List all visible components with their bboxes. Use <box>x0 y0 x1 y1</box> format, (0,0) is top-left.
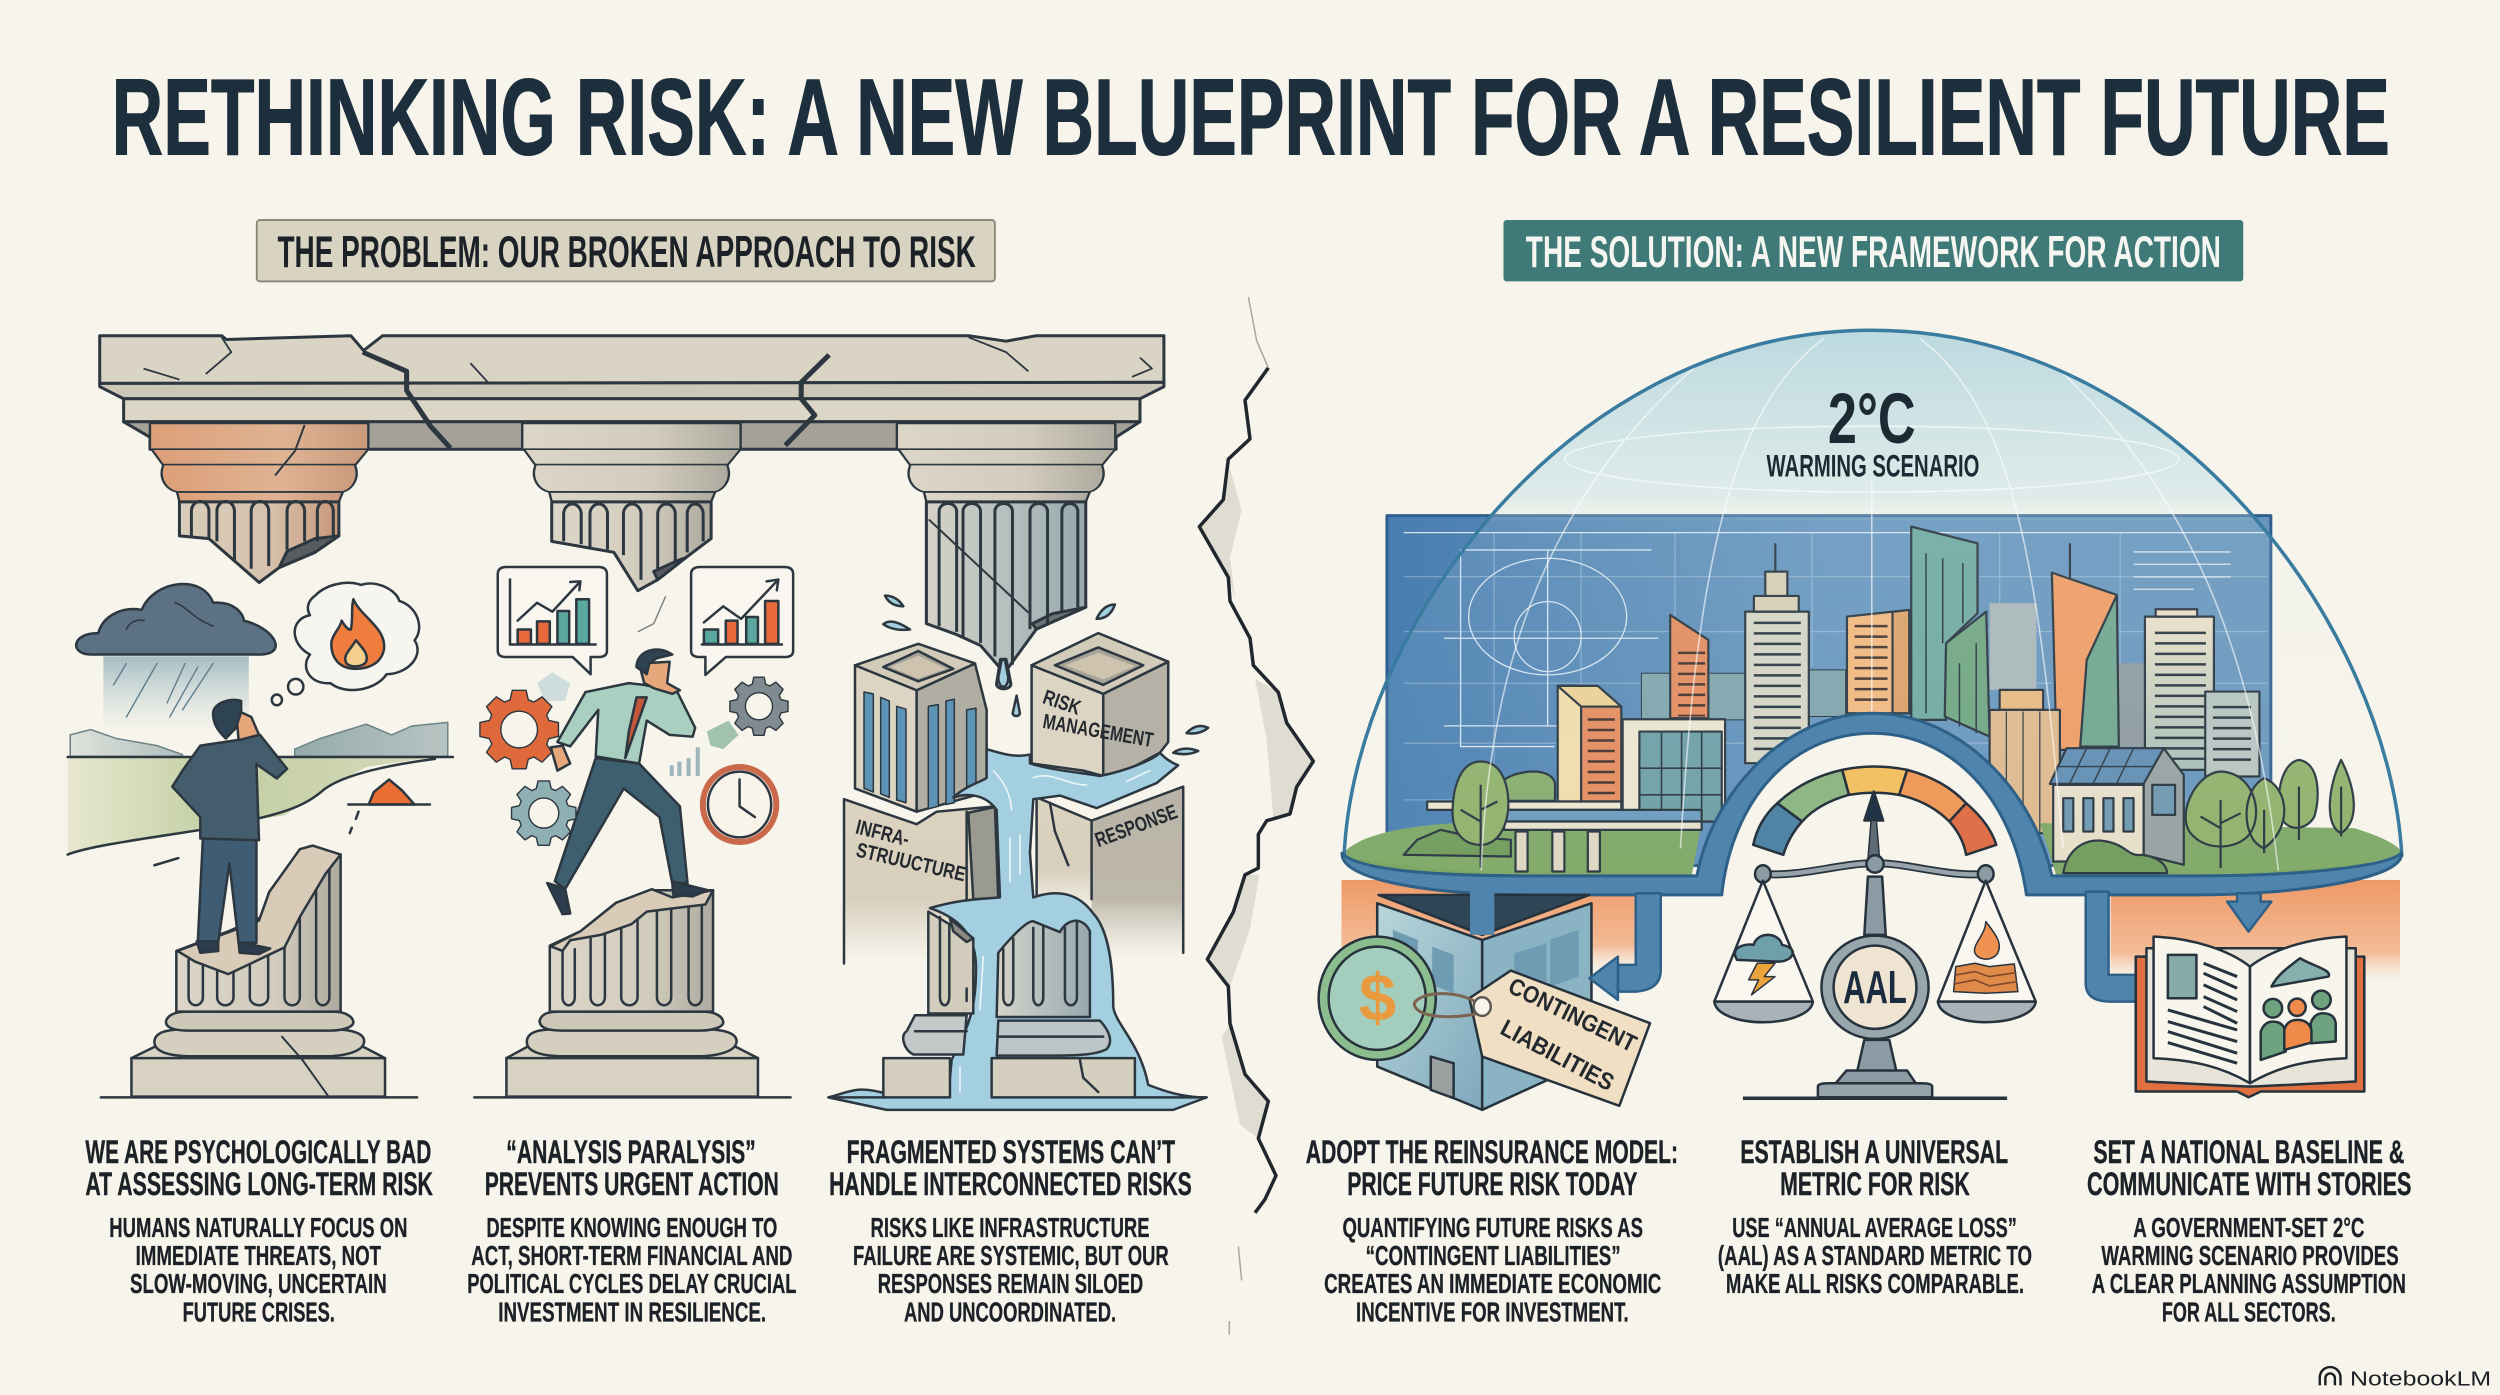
glass dome <box>1344 330 2402 883</box>
text column 6 <box>2087 1133 2411 1328</box>
text column 4: ADOPT THE REINSURANCE MODEL: <box>1306 1133 1678 1170</box>
text column 5: ESTABLISH A UNIVERSAL <box>1740 1133 2008 1170</box>
blueprint drafting lines <box>1404 533 2267 833</box>
right trees <box>2279 760 2354 833</box>
lower silo boxes <box>844 799 997 963</box>
silo labels: RISK <box>1040 686 1084 720</box>
man 1 <box>198 838 256 943</box>
text column 1: SLOW-MOVING, UNCERTAIN <box>130 1268 387 1299</box>
building with coin and contingent liabilities tag <box>1319 890 1661 1110</box>
gauge needle <box>1864 792 1883 821</box>
text column 3 <box>829 1133 1192 1328</box>
stump 1 <box>131 1046 385 1097</box>
balance scale with AAL dial <box>1714 855 2036 1098</box>
silo labels: INFRA- <box>853 816 912 851</box>
text column 1: IMMEDIATE THREATS, NOT <box>136 1240 381 1271</box>
text column 1: HUMANS NATURALLY FOCUS ON <box>109 1212 407 1243</box>
open book with pipe and arrow <box>2086 892 2364 1097</box>
text column 5: METRIC FOR RISK <box>1780 1165 1970 1202</box>
text column 2: ACT, SHORT-TERM FINANCIAL AND <box>471 1240 792 1271</box>
text column 1: WE ARE PSYCHOLOGICALLY BAD <box>85 1133 431 1170</box>
text column 2 <box>467 1133 796 1328</box>
text column 2: DESPITE KNOWING ENOUGH TO <box>486 1212 777 1243</box>
text column 1: AT ASSESSING LONG-TERM RISK <box>85 1165 433 1202</box>
right island <box>2040 823 2401 876</box>
tree <box>1453 762 1508 845</box>
text column 1: FUTURE CRISES. <box>183 1297 335 1328</box>
orange A <box>1670 615 1708 718</box>
green E <box>1945 612 1990 737</box>
text column 3: RESPONSES REMAIN SILOED <box>878 1268 1143 1299</box>
text column 4: “CONTINGENT LIABILITIES” <box>1366 1240 1621 1271</box>
column 1 capital and shaft <box>150 423 368 582</box>
text column 4: PRICE FUTURE RISK TODAY <box>1347 1165 1638 1202</box>
tag <box>1469 971 1650 1106</box>
pillar 1: man, cloud and thought bubble <box>68 583 453 1097</box>
chart bubbles <box>498 567 607 674</box>
lower column 3 <box>997 921 1090 1017</box>
coin <box>1319 937 1436 1060</box>
text column 5: MAKE ALL RISKS COMPARABLE. <box>1726 1268 2024 1299</box>
pillar 3: silos and flood <box>828 596 1208 1110</box>
text column 4: CREATES AN IMMEDIATE ECONOMIC <box>1324 1268 1661 1299</box>
teal D <box>1911 527 1978 720</box>
stump 2 <box>506 1046 758 1097</box>
column 2 capital and shaft <box>522 423 741 632</box>
left pan <box>1714 881 1813 1002</box>
water <box>828 749 1207 1110</box>
upper silo boxes <box>855 665 917 812</box>
right pipe into building <box>1618 893 1661 992</box>
house <box>2144 748 2184 865</box>
section heading: the problem: THE PROBLEM: OUR BROKEN APPROACH TO RISK <box>277 228 976 277</box>
section heading: the problem <box>257 220 995 281</box>
text column 6: FOR ALL SECTORS. <box>2162 1297 2336 1328</box>
column 3 capital and shaft <box>897 423 1115 689</box>
silo labels: STRUUCTURE <box>854 839 968 886</box>
silo labels: RESPONSE <box>1092 800 1181 852</box>
glass building M <box>1623 719 1725 822</box>
text column 3: FAILURE ARE SYSTEMIC, BUT OUR <box>853 1240 1169 1271</box>
silo labels: MANAGEMENT <box>1041 710 1155 752</box>
tan C <box>1847 610 1909 713</box>
tower B <box>1745 612 1809 763</box>
text column 5: USE “ANNUAL AVERAGE LOSS” <box>1732 1212 2017 1243</box>
dome label: 2°C warming scenario: WARMING SCENARIO <box>1767 448 1979 483</box>
silo labels <box>853 686 1181 886</box>
text column 3: FRAGMENTED SYSTEMS CAN’T <box>847 1133 1175 1170</box>
text column 4: INCENTIVE FOR INVESTMENT. <box>1356 1297 1629 1328</box>
text column 4 <box>1306 1133 1678 1328</box>
text column 5 <box>1718 1133 2032 1299</box>
tan K <box>2000 690 2043 710</box>
text column 3: AND UNCOORDINATED. <box>904 1297 1116 1328</box>
text column 1 <box>85 1133 433 1328</box>
text column 6: A GOVERNMENT-SET 2°C <box>2133 1212 2364 1243</box>
tag label: liabilities: LIABILITIES <box>1496 1015 1618 1097</box>
text column 4: QUANTIFYING FUTURE RISKS AS <box>1342 1212 1643 1243</box>
blueprint and city skyline <box>1343 516 2401 876</box>
orange glow beneath the city platform <box>1341 880 2400 983</box>
pillar 2: man running with charts and gears <box>101 567 793 1097</box>
text column 3: HANDLE INTERCONNECTED RISKS <box>829 1165 1192 1202</box>
clock <box>703 767 776 842</box>
dome label: 2°C warming scenario <box>1767 379 1979 483</box>
text column 2: PREVENTS URGENT ACTION <box>485 1165 779 1202</box>
tower I <box>2145 617 2214 770</box>
building L <box>1558 686 1581 802</box>
NotebookLM badge: NotebookLM <box>2350 1367 2491 1390</box>
gauge segments <box>1753 803 1802 855</box>
blue platform, arch and risk gauge <box>1342 713 2401 896</box>
text column 2: “ANALYSIS PARALYSIS” <box>506 1133 756 1170</box>
tower J <box>2205 692 2259 777</box>
road and deck <box>1427 802 1621 810</box>
gears <box>480 677 788 845</box>
NotebookLM badge <box>2320 1367 2491 1390</box>
dome label: 2°C warming scenario: 2°C <box>1828 379 1916 459</box>
text column 5: (AAL) AS A STANDARD METRIC TO <box>1718 1240 2032 1271</box>
entablature with broken upper columns <box>100 336 1164 689</box>
central crack <box>1199 297 1313 1334</box>
coin dollar symbol: $ <box>1359 960 1396 1035</box>
orange G + green H <box>2080 595 2119 747</box>
man 2 <box>555 758 688 889</box>
text column 2: INVESTMENT IN RESILIENCE. <box>498 1297 766 1328</box>
right pan <box>1938 881 2036 1002</box>
small bars <box>670 747 700 776</box>
tag label: contingent: CONTINGENT <box>1504 973 1641 1058</box>
text column 3: RISKS LIKE INFRASTRUCTURE <box>871 1212 1150 1243</box>
section heading: the solution <box>1503 220 2243 281</box>
text column 2: POLITICAL CYCLES DELAY CRUCIAL <box>467 1268 796 1299</box>
stand <box>1857 1040 1896 1072</box>
AAL label: AAL <box>1843 961 1907 1013</box>
dial <box>1821 936 1929 1039</box>
